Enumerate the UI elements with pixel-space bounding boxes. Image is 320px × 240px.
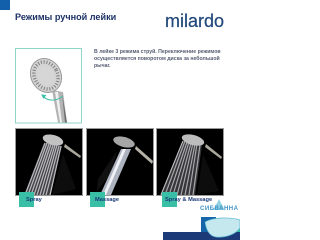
corner accent block — [0, 0, 10, 10]
photo: massage — [87, 129, 153, 195]
arrow: rotate disc — [42, 95, 63, 100]
mode tag: spray and massage: Spray & Massage — [165, 196, 212, 202]
mode tag: massage — [90, 192, 119, 207]
mode tag: spray and massage — [162, 192, 212, 207]
mode tag: spray: Spray — [26, 196, 42, 202]
shower handle — [52, 90, 67, 122]
description text — [94, 48, 221, 68]
title: Режимы ручной лейки — [15, 12, 116, 22]
photo: spray and massage — [157, 129, 223, 195]
drop — [214, 199, 224, 210]
photo: spray — [16, 129, 82, 195]
description text: осуществляется поворотом диска за небольшой — [94, 56, 220, 62]
mode tag: spray — [19, 192, 42, 207]
shower head — [24, 52, 68, 99]
brand text: СИБВАННА — [200, 206, 239, 212]
description text: рычаг. — [94, 62, 111, 68]
brand logo: milardo: milardo — [165, 11, 224, 31]
panel: hand shower illustration — [15, 48, 82, 124]
bathtub — [205, 218, 240, 237]
watermark logo: sibvanna — [163, 199, 240, 240]
mode tag: massage: Massage — [95, 196, 119, 202]
description text: В лейке 3 режима струй. Переключение режимов — [94, 48, 221, 54]
